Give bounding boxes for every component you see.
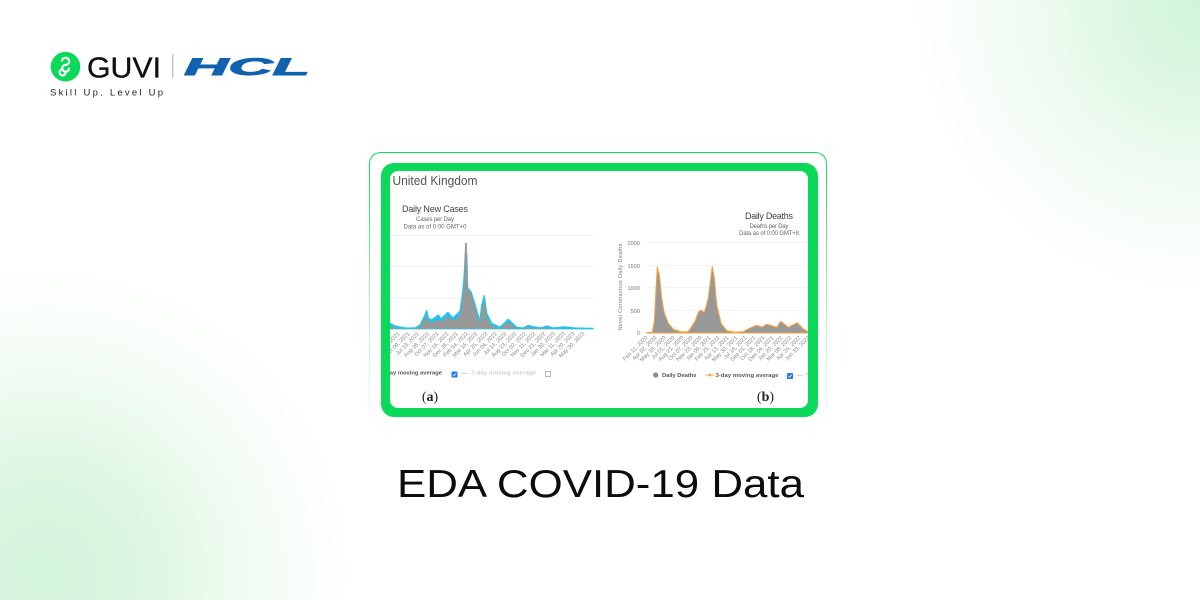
chart a date labels: Nov 16, 2021: [423, 331, 450, 359]
chart b date labels: [622, 335, 811, 363]
chart b date labels: Dec 04, 2021: [748, 335, 775, 363]
chart b date labels: May 30, 2021: [711, 335, 739, 363]
green frame: [381, 163, 818, 417]
chart b title: Daily Deaths: [745, 211, 794, 221]
chart a date labels: Jul 19, 2021: [395, 331, 421, 357]
caption (a): (a): [422, 390, 438, 405]
chart b date labels: Jun 10, 2022: [784, 335, 811, 362]
chart a title: Cases per Day: [416, 217, 454, 223]
chart b date labels: Oct 07, 2020: [668, 335, 694, 362]
chart b legend: 3-day moving average: [716, 373, 779, 379]
chart b legend: 7-day: [805, 373, 821, 379]
chart b date labels: May 19, 2020: [639, 335, 667, 363]
chart b area: gray daily deaths and orange moving average: [647, 267, 808, 333]
chart a date labels: May 30, 2021: [373, 331, 401, 359]
chart a legend: 7-day moving average: [471, 370, 537, 376]
chart b date labels: Feb 25, 2021: [694, 335, 721, 363]
chart a date labels: Mar 11, 2023: [540, 331, 567, 358]
chart b legend: Daily Deaths: [662, 373, 696, 379]
tagline: Skill Up. Level Up: [50, 88, 163, 98]
chart a date labels: Jun 09, 2021: [384, 331, 411, 358]
HCL wordmark: HCL: [184, 54, 310, 81]
chart b: daily deaths: [618, 211, 821, 379]
chart b axis labels: 0: [637, 331, 640, 337]
logo divider: [172, 54, 173, 78]
chart b date labels: Oct 18, 2021: [740, 335, 766, 362]
chart b date labels: Apr 02, 2020: [632, 335, 658, 362]
chart a title: Daily New Cases: [402, 204, 468, 214]
chart b axis labels: 1000: [628, 286, 640, 292]
chart a date labels: Jul 14, 2022: [483, 331, 508, 357]
chart b date labels: Mar 08, 2022: [766, 335, 793, 363]
chart a date labels: Mar 16, 2022: [452, 331, 479, 359]
chart b gridlines: [646, 242, 808, 310]
white chart area: [390, 171, 808, 408]
chart b axis labels: [618, 241, 640, 337]
caption (b): (b): [757, 390, 774, 405]
chart b date labels: Aug 21, 2020: [658, 335, 685, 363]
icon: GUVI green circle: [51, 52, 80, 82]
chart a title: Data as of 0:00 GMT+0: [404, 224, 467, 230]
chart b legend: [653, 372, 821, 379]
chart a date labels: Feb 04, 2022: [442, 331, 470, 359]
chart a legend: 3-day moving average: [381, 370, 443, 376]
GUVI wordmark: GUVI: [87, 52, 161, 84]
chart a date labels: Nov 11, 2022: [510, 331, 537, 359]
chart b date labels: Apr 13, 2021: [704, 335, 730, 362]
chart b axis labels: 2000: [628, 241, 640, 247]
chart b axis labels: 500: [631, 309, 640, 315]
chart b date labels: Sep 01, 2021: [730, 335, 757, 363]
chart a: daily new cases: [373, 204, 593, 378]
chart b date labels: Apr 24, 2022: [776, 335, 802, 362]
chart b date labels: Jul 16, 2021: [723, 335, 748, 361]
chart a legend: [381, 370, 550, 378]
panel: image card: [370, 152, 826, 424]
chart a date labels: Oct 07, 2021: [414, 331, 440, 358]
chart a area: cyan moving average and gray daily values: [390, 243, 593, 329]
chart b axis labels: Novel Coronavirus Daily Deaths: [618, 243, 624, 330]
chart a date labels: Dec 21, 2022: [520, 331, 547, 359]
chart b date labels: Jul 01, 2020: [651, 335, 676, 361]
chart b date labels: Nov 23, 2020: [676, 335, 703, 363]
chart a date labels: Apr 20, 2023: [550, 331, 576, 358]
chart b axis labels: 1500: [628, 264, 640, 270]
chart b date labels: Jan 20, 2022: [757, 335, 784, 362]
chart b title: Deaths per Day: [750, 224, 788, 230]
chart b title: Data as of 0:00 GMT+8: [739, 231, 800, 237]
logo: GUVI and HCL: [50, 52, 310, 98]
chart b date labels: Jan 09, 2021: [685, 335, 712, 362]
chart a date labels: Jan 30, 2023: [530, 331, 557, 358]
chart a date labels: Dec 26, 2021: [432, 331, 460, 359]
chart a date labels: Aug 28, 2021: [403, 331, 431, 359]
heading: United Kingdom: United Kingdom: [392, 174, 478, 188]
chart a date labels: Oct 02, 2022: [501, 331, 528, 358]
chart a date labels: May 30, 2023: [558, 331, 586, 359]
chart a date labels: Jun 04, 2022: [472, 331, 499, 358]
card outline: [370, 152, 826, 424]
chart a date labels: [390, 332, 584, 358]
chart b title: [740, 212, 799, 235]
title: EDA COVID-19 Data: [397, 463, 804, 506]
chart a title: [402, 206, 468, 228]
chart b date labels: Feb 11, 2020: [622, 335, 649, 362]
chart a gridlines: [390, 236, 593, 298]
chart a date labels: Aug 23, 2022: [491, 331, 518, 359]
chart a date labels: Apr 25, 2022: [463, 331, 489, 358]
